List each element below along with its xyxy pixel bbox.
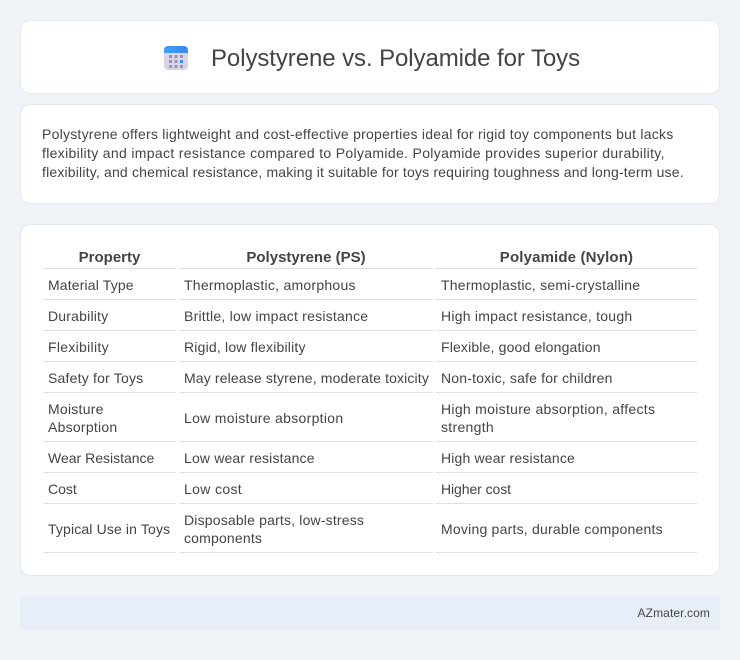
row: safety for toys: Safety for Toys [48,370,143,386]
row: safety for toys: Non-toxic, safe for children [441,370,613,386]
row: safety for toys [48,370,613,386]
table header: Polyamide: Polyamide (Nylon) [500,249,633,266]
summary line 1: Polystyrene offers lightweight and cost-effective properties ideal for rigid toy components but lacks [42,126,673,142]
row: typical use in toys: Disposable parts, low-stress [184,512,364,528]
row: cost: Cost [48,481,77,497]
summary line 3: flexibility, and chemical resistance, making it suitable for toys requiring toughness and long-term use. [42,164,684,180]
row: moisture absorption: Moisture [48,401,104,417]
row: wear resistance: High wear resistance [441,450,575,466]
row: material type: Material Type [48,277,134,293]
panel: title card [20,20,720,94]
row: moisture absorption: strength [441,419,494,435]
row: durability: High impact resistance, tough [441,308,632,324]
table header: Polystyrene: Polystyrene (PS) [246,249,366,266]
row: typical use in toys: Typical Use in Toys [48,521,170,537]
row: typical use in toys: components [184,530,262,546]
row: wear resistance: Wear Resistance [48,450,154,466]
row: flexibility: Flexible, good elongation [441,339,601,355]
panel: comparison table [20,224,720,576]
row: typical use in toys [48,512,663,546]
row: flexibility: Rigid, low flexibility [184,339,306,355]
row: durability: Durability [48,308,108,324]
row: cost: Higher cost [441,481,511,497]
row: durability [48,308,632,324]
row: moisture absorption: Absorption [48,419,117,435]
title: Polystyrene vs. Polyamide for Toys [211,45,580,72]
footer credit: AZmater.com [638,606,710,620]
footer bar [20,596,720,630]
row: moisture absorption: Low moisture absorption [184,410,343,426]
row: moisture absorption [48,401,655,435]
row: wear resistance: Low wear resistance [184,450,315,466]
row: moisture absorption: High moisture absorption, affects [441,401,655,417]
summary line 2: flexibility and impact resistance compared to Polyamide. Polyamide provides superior durability, [42,145,665,161]
row: typical use in toys: Moving parts, durable components [441,521,663,537]
panel: summary text [20,104,720,204]
row: durability: Brittle, low impact resistance [184,308,368,324]
row: material type: Thermoplastic, semi-crystalline [441,277,640,293]
row: cost: Low cost [184,481,242,497]
row: flexibility [48,339,601,355]
row: wear resistance [48,450,575,466]
row: safety for toys: May release styrene, moderate toxicity [184,370,429,386]
row: material type: Thermoplastic, amorphous [184,277,356,293]
row: cost [48,481,511,497]
row: flexibility: Flexibility [48,339,109,355]
icon: calendar grid [164,46,188,70]
table header: Property: Property [79,249,140,266]
row: material type [48,277,640,293]
